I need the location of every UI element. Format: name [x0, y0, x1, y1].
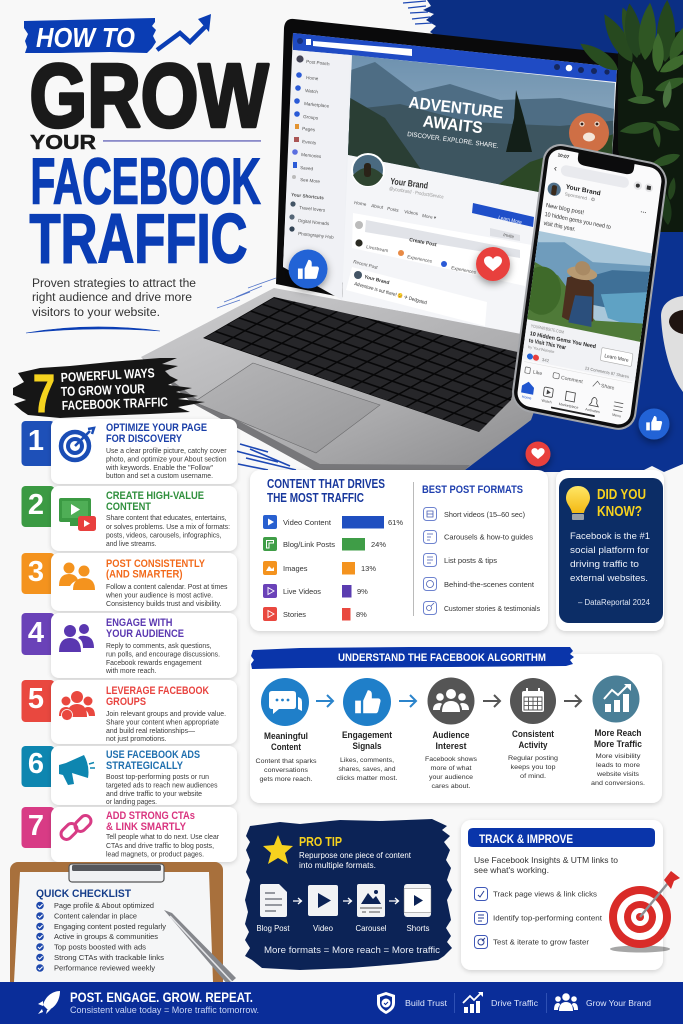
step: meaningful content: [256, 678, 317, 783]
step 5: leverage facebook groups: not just promotions.: [106, 736, 167, 743]
format: blog post: Blog Post: [256, 924, 290, 933]
illustration: potted plant: [576, 0, 683, 232]
step: engagement signals: Engagement: [342, 730, 392, 740]
icon: heart bubble on laptop: [476, 247, 510, 281]
best post formats list: [424, 508, 540, 614]
phone reactions and actions: [523, 353, 633, 395]
best post formats list: List posts & tips: [444, 556, 497, 565]
step 6: use facebook ads: or landing pages.: [106, 799, 157, 806]
format: shorts: [404, 884, 431, 933]
laptop screen: [283, 33, 617, 350]
bar row: live videos: 9%: [357, 587, 368, 596]
panel: content that drives traffic: [250, 470, 548, 631]
phone status and search: ‹: [553, 163, 558, 173]
illustration: cartoon mascot face: [569, 113, 609, 153]
illustration: smartphone: [507, 140, 669, 433]
checklist items: Performance reviewed weekly: [54, 964, 155, 972]
left sidebar: Watch: [305, 88, 319, 94]
bar row: images: [263, 561, 376, 575]
left sidebar: Pages: [302, 126, 316, 132]
phone link preview: to Visit This Year: [529, 338, 567, 352]
panel: did you know: [556, 470, 664, 631]
create post card: Livestream: [366, 244, 389, 253]
panel: did you know: DID YOU: [597, 487, 646, 503]
icon: heart bubble on desk: [526, 442, 550, 466]
panel: did you know: – DataReportal 2024: [578, 598, 651, 607]
bar row: live videos: [263, 584, 368, 598]
checklist items: Content calendar in place: [54, 912, 137, 920]
create post card: [352, 213, 532, 286]
step 4: engage with your audience: YOUR AUDIENCE: [106, 628, 184, 640]
panel: pro tip: More formats = More reach = More traffic: [264, 945, 440, 956]
clipboard clip: [69, 864, 164, 882]
step 1: optimize your page: FOR DISCOVERY: [106, 433, 183, 445]
left sidebar: Events: [302, 139, 317, 146]
step 7: add strong ctas: ADD STRONG CTAs: [106, 810, 195, 822]
step 3: post consistently: Consistency builds trust and visibility.: [106, 601, 222, 608]
did you know text: driving traffic to: [570, 559, 639, 569]
phone reactions and actions: 23 Comments 87 Shares: [585, 366, 629, 379]
step: audience interest: Interest: [436, 741, 467, 751]
left sidebar: Home: [306, 75, 319, 81]
checklist items: Strong CTAs with trackable links: [54, 953, 164, 962]
step 1: optimize your page: OPTIMIZE YOUR PAGE: [106, 422, 207, 434]
left sidebar: Photography Hub: [298, 231, 334, 240]
step: meaningful content: gets more reach.: [260, 776, 313, 783]
step: consistent activity: Activity: [518, 740, 548, 750]
footer band: [0, 982, 683, 1024]
recent post card: Your Brand: [364, 274, 390, 286]
step 6: use facebook ads: STRATEGICALLY: [106, 760, 184, 772]
step: engagement signals: shares, saves, and: [338, 766, 396, 773]
step 6: use facebook ads: and drive traffic to your website: [106, 791, 202, 798]
bar row: blog/link posts: Blog/Link Posts: [283, 540, 335, 549]
step 6: use facebook ads: USE FACEBOOK ADS: [106, 749, 200, 761]
panel: quick checklist clipboard: [10, 862, 236, 992]
track list: Test & iterate to grow faster: [493, 938, 589, 946]
phone post header: [547, 180, 648, 217]
step 1: optimize your page: 1: [28, 425, 44, 457]
bar row: stories: 8%: [356, 610, 367, 619]
icon: group with alert: [59, 691, 95, 720]
phone bottom navigation: [520, 380, 624, 422]
format: video: [308, 885, 338, 933]
format: carousel: Carousel: [356, 924, 387, 933]
icon: like bubble on desk: [638, 408, 670, 440]
left sidebar: Travel lovers: [299, 205, 326, 213]
step 3: post consistently: Follow a content calendar. Post at times: [106, 584, 228, 591]
step: consistent activity: keeps you top: [510, 764, 556, 771]
checklist items: Engaging content posted regularly: [54, 922, 166, 931]
step 5: leverage facebook groups: 5: [28, 683, 44, 715]
pen: [164, 910, 236, 985]
bar row: stories: Stories: [283, 610, 306, 619]
phone notch: [577, 152, 635, 175]
arrow: [483, 695, 500, 707]
step 2: create high-value content: and live streams.: [106, 541, 157, 548]
bar row: stories: [263, 607, 367, 621]
step 6: use facebook ads: 6: [28, 748, 44, 780]
phone link preview: 10 Hidden Gems You Need: [529, 331, 597, 350]
left sidebar: Digital Nomads: [298, 218, 330, 226]
step 7: add strong ctas: [22, 807, 237, 862]
panel: did you know: KNOW?: [597, 504, 642, 520]
trackpad: [194, 363, 380, 453]
icon: light bulb: [566, 486, 590, 520]
phone link preview: Learn More: [604, 353, 629, 364]
step: more reach more traffic: More Traffic: [594, 739, 642, 749]
recent post card: Recent Post: [353, 259, 379, 270]
icon: star: [263, 835, 293, 864]
section banner: 7 powerful ways: TO GROW YOUR: [61, 381, 146, 399]
arrow: [316, 695, 333, 707]
panel: understand the facebook algorithm: [250, 647, 662, 803]
traffic heading: TRAFFIC: [30, 200, 248, 278]
page profile: Learn More: [498, 215, 522, 226]
how to brush banner: [24, 18, 156, 53]
step 7: add strong ctas: & LINK SMARTLY: [106, 821, 187, 833]
step: audience interest: [425, 678, 478, 790]
phone link preview: by YourWebsite: [528, 345, 555, 354]
page profile: [342, 153, 610, 350]
phone link preview: [522, 319, 640, 382]
left sidebar: Memories: [301, 152, 322, 159]
footer band: Consistent value today = More traffic tomorrow.: [70, 1004, 259, 1015]
step 7: add strong ctas: lead magnets, or product pages.: [106, 852, 204, 858]
phone bottom navigation: Watch: [541, 399, 552, 405]
icon: target: [61, 428, 94, 460]
step: meaningful content: Content: [271, 742, 301, 752]
badge: drive traffic: [463, 992, 539, 1013]
step 5: leverage facebook groups: GROUPS: [106, 696, 146, 708]
step 3: post consistently: (AND SMARTER): [106, 568, 183, 580]
page profile: Home: [354, 200, 367, 207]
panel: pro tip: Repurpose one piece of content: [299, 851, 412, 860]
step: audience interest: Facebook shows: [425, 756, 478, 763]
step 1: optimize your page: button and set a custom username.: [106, 473, 213, 480]
step 5: leverage facebook groups: LEVERAGE FACEBOOK: [106, 685, 209, 697]
step 3: post consistently: POST CONSISTENTLY: [106, 558, 206, 570]
step: consistent activity: Consistent: [512, 729, 554, 739]
bar row: images: Images: [283, 564, 308, 573]
step 2: create high-value content: or solves problems. Use a mix of formats:: [106, 524, 230, 531]
phone post photo: [527, 231, 652, 343]
step: engagement signals: Likes, comments,: [340, 757, 394, 764]
step 6: use facebook ads: targeted ads to reach new audiences: [106, 782, 218, 790]
bar row: blog/link posts: 24%: [371, 540, 386, 549]
icon: chain link: [59, 813, 93, 842]
phone status and search: 10:07: [557, 152, 570, 160]
phone post header: Your Brand: [565, 184, 601, 197]
create post card: Create Post: [409, 237, 437, 248]
facebook heading: FACEBOOK: [30, 144, 261, 218]
step: audience interest: cares about.: [432, 783, 471, 790]
footer band: POST. ENGAGE. GROW. REPEAT.: [70, 990, 253, 1005]
step 5: leverage facebook groups: [22, 680, 237, 744]
step: consistent activity: [508, 678, 558, 780]
phone bottom navigation: Menu: [612, 413, 621, 418]
step 1: optimize your page: [22, 419, 237, 484]
step 6: use facebook ads: [22, 746, 237, 806]
left sidebar: Post Poach: [306, 59, 330, 66]
page profile: About: [371, 203, 384, 210]
left sidebar: Groups: [303, 114, 319, 121]
format: carousel: [356, 884, 387, 933]
icon: video monitor: [59, 498, 96, 531]
step: meaningful content: conversations: [264, 767, 309, 774]
page profile: @yourbrand · Product/Service: [389, 186, 444, 201]
bar row: blog/link posts: [263, 537, 386, 551]
phone reactions and actions: Share: [601, 383, 615, 392]
bar row: images: 13%: [361, 564, 376, 573]
checklist items: [36, 901, 166, 972]
step 2: create high-value content: 2: [28, 489, 44, 521]
phone post header: ···: [640, 210, 647, 217]
step: audience interest: Audience: [432, 730, 470, 740]
best post formats list: Behind-the-scenes content: [444, 580, 534, 589]
panel: pro tip: [245, 819, 452, 970]
phone bottom navigation: Marketplace: [559, 402, 579, 410]
checklist items: Top posts boosted with ads: [54, 942, 146, 952]
page profile: Posts: [387, 206, 400, 213]
hero background: blue brushed wall and desk: [217, 0, 683, 472]
panel: track and improve: [461, 820, 680, 970]
step 2: create high-value content: Share content that educates, entertains,: [106, 515, 227, 522]
track list: Track page views & link clicks: [493, 890, 597, 898]
panel: pro tip: into multiple formats.: [299, 861, 376, 870]
icon: target with arrow: [609, 871, 680, 952]
section banner: 7 powerful ways: [13, 358, 205, 424]
panel: pro tip: PRO TIP: [299, 835, 342, 849]
step 4: engage with your audience: Facebook rewards engagement: [106, 660, 202, 667]
section banner: 7 powerful ways: 7: [33, 364, 55, 424]
badge: drive traffic: Drive Traffic: [491, 998, 539, 1008]
arrow: [399, 695, 416, 707]
title block: [24, 14, 269, 333]
content heading: [267, 477, 385, 505]
left sidebar: Your Shortcuts: [291, 192, 325, 200]
section banner: 7 powerful ways: FACEBOOK TRAFFIC: [62, 394, 169, 413]
page profile: Your Brand: [390, 176, 429, 191]
badge: build trust: [377, 992, 448, 1014]
step 4: engage with your audience: Reply to comments, ask questions,: [106, 643, 212, 650]
page profile: Invite: [503, 232, 515, 239]
did you know text: social platform for: [570, 545, 649, 555]
step 2: create high-value content: [22, 486, 237, 551]
track banner: [468, 828, 655, 847]
step 3: post consistently: when your audience is most active.: [105, 592, 213, 600]
left sidebar: [283, 50, 350, 300]
left sidebar: Marketplace: [304, 101, 330, 109]
step 1: optimize your page: with keywords. Enable the "Follow": [105, 465, 214, 472]
subtitle: right audience and drive more: [32, 290, 192, 304]
subtitle: visitors to your website.: [32, 305, 160, 319]
icon: like bubble on laptop: [288, 250, 328, 288]
recent post card: [346, 259, 487, 326]
track list: Identify top-performing content: [493, 914, 603, 922]
create post card: Experiences: [451, 265, 477, 275]
step 2: create high-value content: CONTENT: [106, 501, 151, 513]
phone post header: Sponsored · ✪: [565, 191, 595, 202]
bar row: video content: Video Content: [283, 518, 332, 527]
step 7: add strong ctas: CTAs and drive traffic to blog posts,: [106, 843, 214, 850]
subtitle: Proven strategies to attract the: [32, 276, 196, 290]
bar row: live videos: Live Videos: [283, 587, 321, 596]
recent post card: Adventure is out there! 😊 ✈ Dedgsted: [353, 280, 428, 306]
badge: grow your brand: Grow Your Brand: [586, 998, 651, 1008]
step 5: leverage facebook groups: Join relevant groups and provide value.: [106, 711, 226, 718]
algorithm banner: [251, 647, 574, 669]
step 2: create high-value content: posts, videos, carousels, infographics,: [106, 532, 222, 540]
phone reactions and actions: Comment: [561, 375, 584, 385]
phone reactions and actions: Like: [533, 369, 543, 377]
step: more reach more traffic: More Reach: [594, 728, 642, 738]
laptop bezel: [276, 19, 630, 352]
phone link preview: YOURWEBSITE.COM: [531, 323, 565, 335]
panel: track and improve: see what's working.: [474, 866, 549, 875]
phone post copy: 10 hidden gems you need to: [544, 212, 612, 231]
step: more reach more traffic: website visits: [596, 771, 640, 778]
phone post copy: visit this year.: [543, 221, 576, 233]
step 2: create high-value content: CREATE HIGH-VALUE: [106, 490, 204, 502]
step 4: engage with your audience: [22, 613, 237, 678]
create post card: Experiences: [407, 254, 433, 264]
step 6: use facebook ads: Boost top-performing posts or run: [106, 774, 209, 781]
step: more reach more traffic: More visibility: [596, 753, 641, 760]
illustration: coffee cup: [661, 296, 683, 392]
cover photo: adventure awaits: ADVENTURE: [408, 94, 504, 122]
did you know text: external websites.: [570, 573, 648, 583]
step 3: post consistently: 3: [28, 556, 44, 588]
icon: two people purple: [59, 624, 94, 652]
left sidebar: See More: [300, 177, 321, 184]
step 5: leverage facebook groups: and build real relationships—: [106, 728, 195, 735]
page profile: Videos: [404, 209, 419, 216]
content heading: CONTENT THAT DRIVES: [267, 477, 385, 491]
step 4: engage with your audience: with more reach.: [105, 668, 157, 675]
track list: [474, 888, 603, 948]
how to text: HOW TO: [36, 22, 135, 53]
icon: megaphone: [59, 755, 95, 785]
step: more reach more traffic: leads to more: [596, 762, 640, 769]
arrow: [564, 695, 581, 707]
badge: build trust: Build Trust: [405, 998, 448, 1008]
step: audience interest: more of what: [430, 765, 472, 772]
step: engagement signals: [336, 678, 398, 782]
step 1: optimize your page: Use a clear profile picture, catchy cover: [106, 448, 227, 455]
content heading: THE MOST TRAFFIC: [267, 491, 364, 505]
icon: growth arrow: [157, 14, 211, 50]
panel: understand the facebook algorithm: UNDERSTAND THE FACEBOOK ALGORITHM: [338, 652, 546, 664]
phone post copy: [543, 203, 613, 240]
best post formats list: Short videos (15–60 sec): [444, 510, 525, 519]
page profile: More ▾: [422, 213, 437, 220]
step 5: leverage facebook groups: Share your content when appropriate: [106, 720, 219, 726]
your heading: YOUR: [30, 131, 96, 154]
step: consistent activity: of mind.: [520, 773, 546, 780]
subtitle: [32, 276, 196, 319]
step 3: post consistently: [22, 553, 237, 611]
step: more reach more traffic: and conversions.: [591, 780, 645, 787]
checklist items: Page profile & About optimized: [54, 901, 154, 910]
checklist title: QUICK CHECKLIST: [36, 888, 131, 900]
step: engagement signals: clicks matter most.: [336, 775, 398, 782]
section banner: 7 powerful ways: POWERFUL WAYS: [60, 365, 155, 385]
best post formats heading: BEST POST FORMATS: [422, 484, 523, 496]
step: more reach more traffic: [591, 676, 645, 787]
cover photo: adventure awaits: DISCOVER. EXPLORE. SHARE.: [407, 131, 499, 150]
best post formats list: Customer stories & testimonials: [444, 604, 540, 613]
format: blog post: [256, 884, 290, 933]
phone post copy: New blog post!: [545, 203, 585, 217]
format: video: Video: [313, 924, 334, 933]
icon: rocket: [38, 991, 60, 1014]
step: audience interest: your audience: [429, 774, 473, 781]
did you know text: Facebook is the #1: [570, 531, 650, 541]
step 4: engage with your audience: run polls, and encourage discussions.: [106, 652, 220, 658]
checklist items: Active in groups & communities: [54, 932, 158, 941]
facebook top bar: [293, 33, 617, 82]
bar row: video content: 61%: [388, 518, 403, 527]
step 1: optimize your page: photo, and optimize your About section: [106, 456, 227, 464]
cover photo: adventure awaits: [348, 55, 615, 192]
step 4: engage with your audience: 4: [28, 617, 44, 649]
step 7: add strong ctas: Tell people what to do next. Use clear: [106, 834, 220, 841]
grow heading: GROW: [30, 46, 269, 146]
illustration: laptop: [141, 19, 630, 470]
step: consistent activity: Regular posting: [508, 755, 558, 762]
icon: two people orange: [59, 562, 95, 590]
phone bottom navigation: Activates: [585, 407, 600, 414]
step: meaningful content: Meaningful: [264, 731, 308, 741]
panel: track and improve: Use Facebook Insights & UTM links to: [474, 856, 618, 865]
step: engagement signals: Signals: [352, 741, 382, 751]
left sidebar: Saved: [300, 165, 314, 171]
phone bottom navigation: Home: [522, 395, 532, 400]
cover photo: adventure awaits: AWAITS: [422, 113, 484, 137]
did you know text: [570, 531, 650, 583]
badge: grow your brand: [554, 993, 651, 1011]
laptop base: [141, 288, 560, 470]
best post formats list: Carousels & how-to guides: [444, 532, 533, 542]
step: meaningful content: Content that sparks: [256, 758, 317, 765]
phone status and search: [553, 152, 655, 194]
phone reactions and actions: 342: [542, 357, 550, 363]
step 4: engage with your audience: ENGAGE WITH: [106, 617, 173, 629]
keyboard: [203, 297, 522, 432]
panel: track and improve: TRACK & IMPROVE: [479, 834, 573, 846]
format: shorts: Shorts: [406, 924, 430, 933]
step 7: add strong ctas: 7: [28, 810, 44, 842]
bar row: video content: [263, 515, 403, 529]
